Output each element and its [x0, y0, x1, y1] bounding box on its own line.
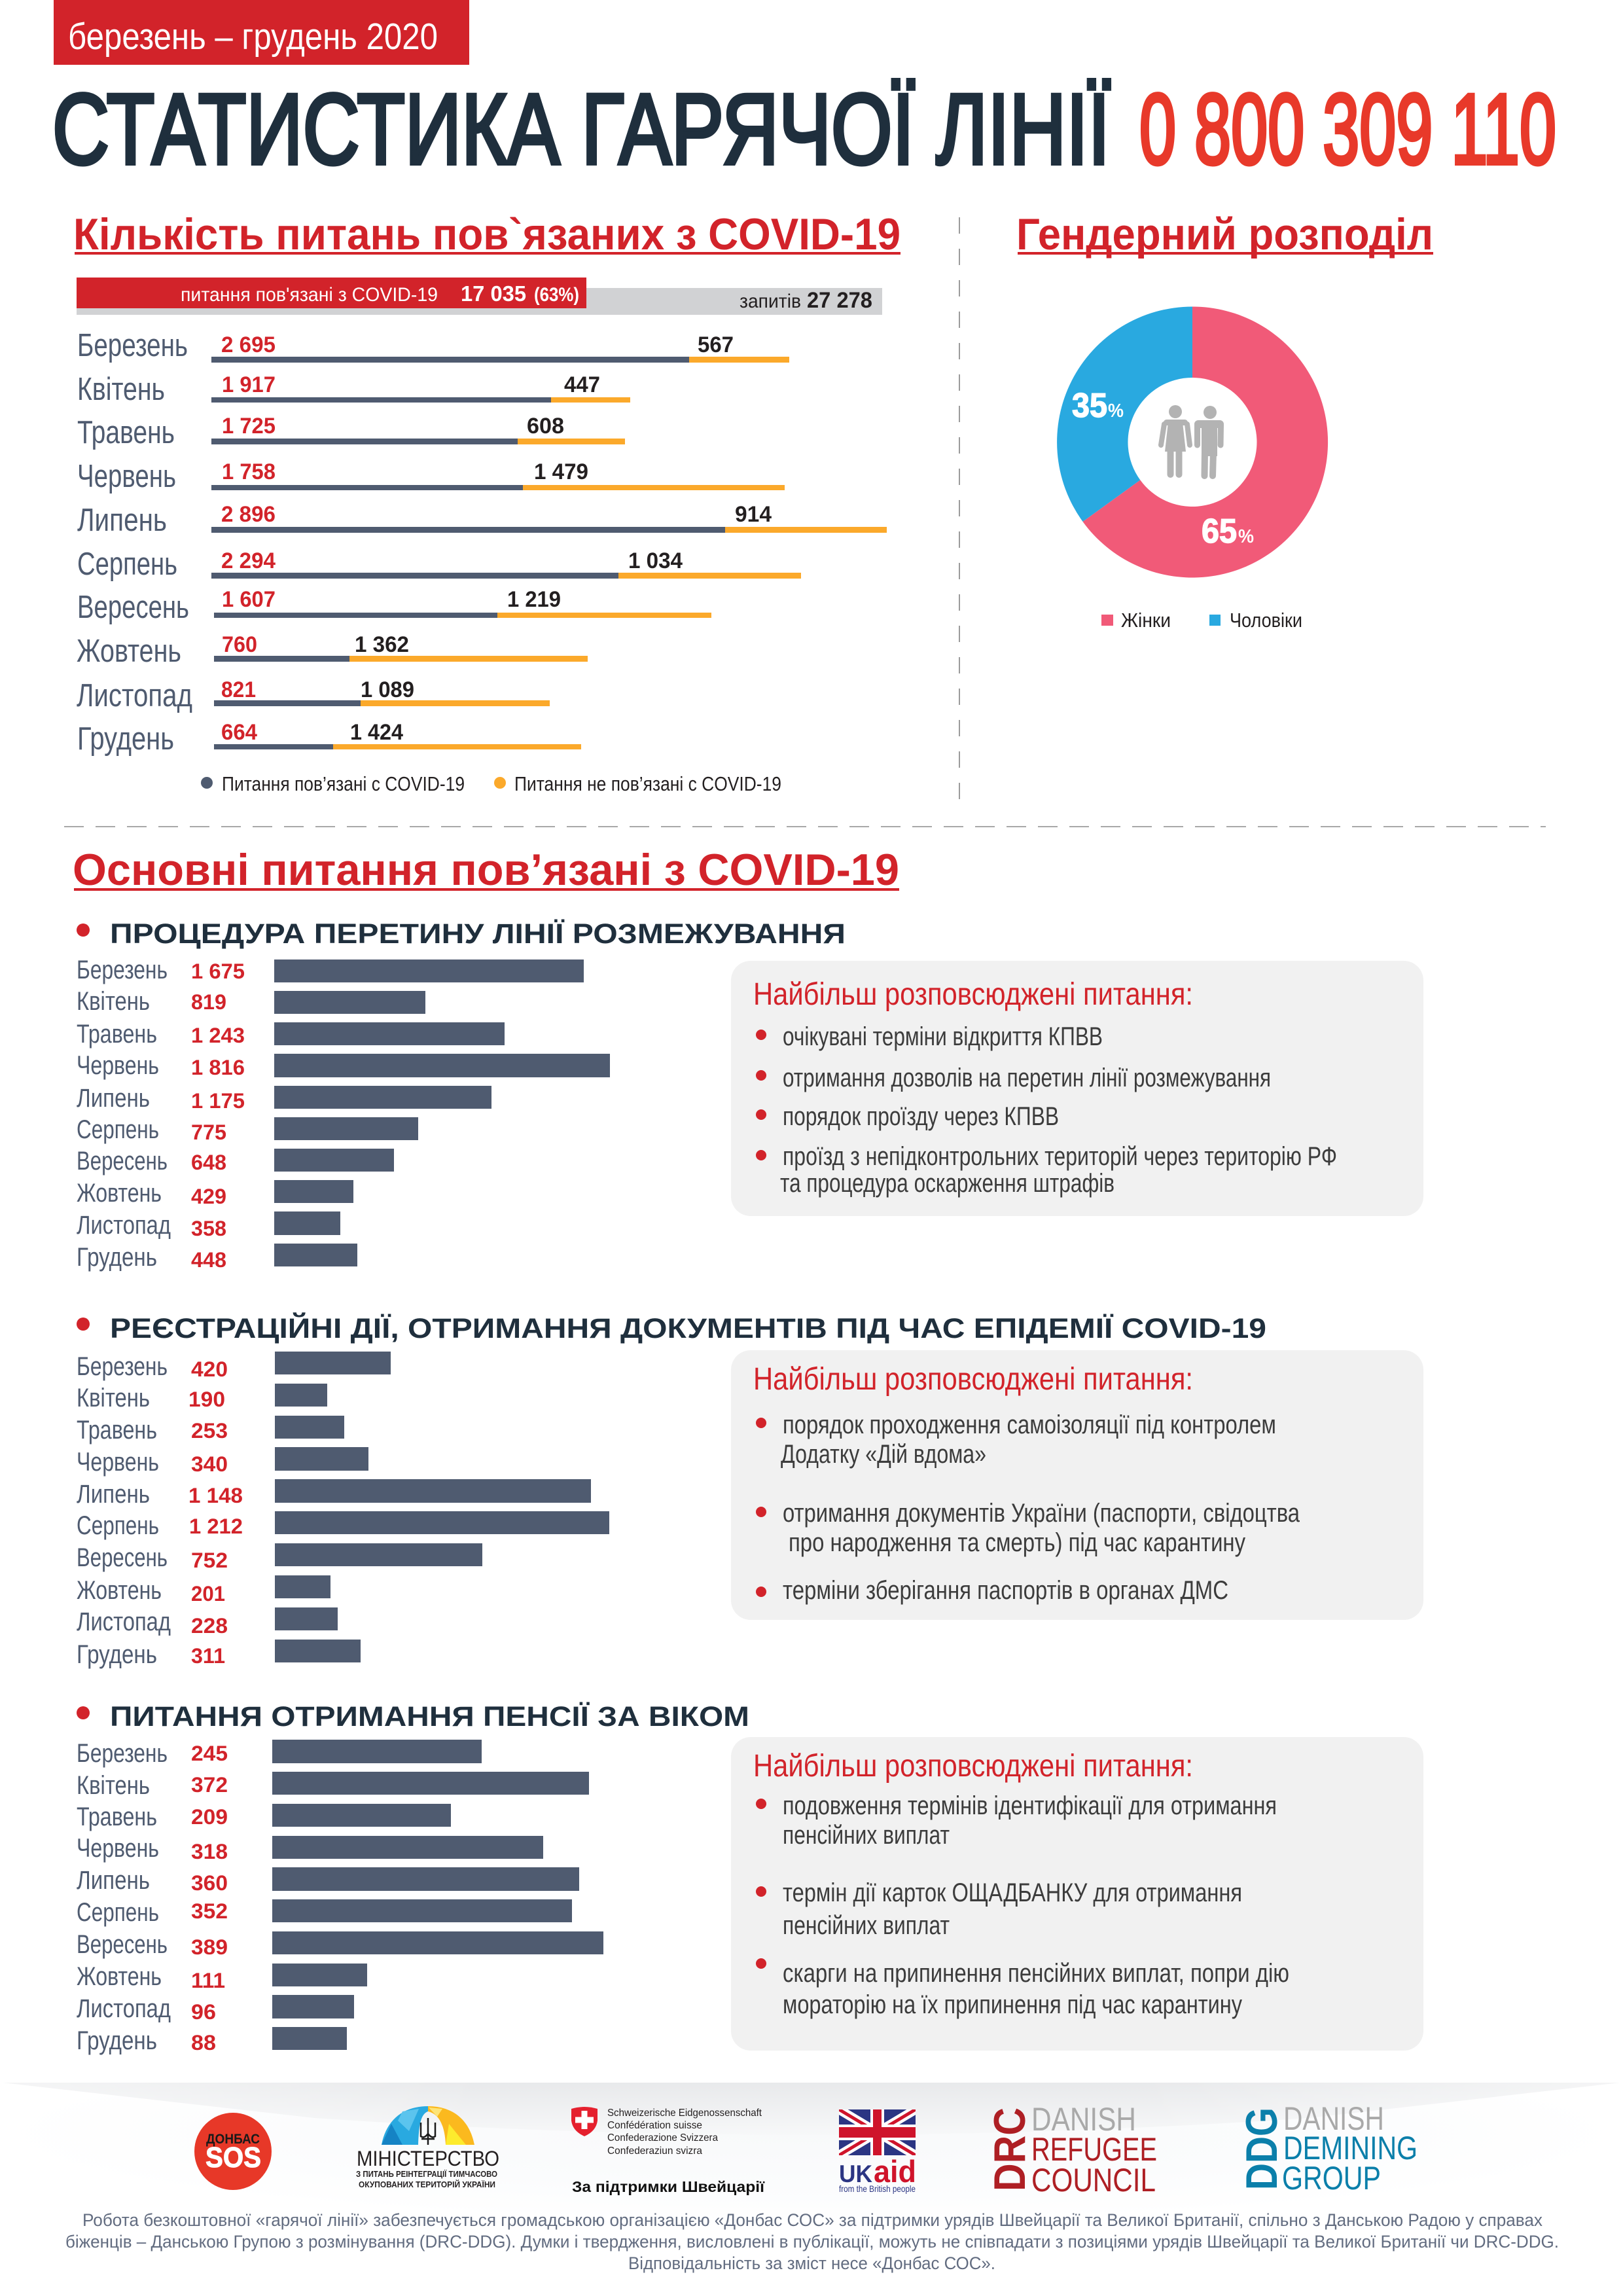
logo: Danish Refugee Council: COUNCIL — [1031, 2162, 1156, 2198]
footer disclaimer text — [65, 2210, 1559, 2273]
row: липень 360: Липень — [77, 1866, 150, 1895]
row: травень 1 243 — [77, 1020, 505, 1049]
row: листопад 96: Листопад — [77, 1994, 171, 2023]
row: жовтень 201: Жовтень — [77, 1576, 162, 1605]
row: березень — [77, 328, 789, 363]
row: вересень 389 — [77, 1930, 603, 1959]
section heading: registration and documents: РЕЄСТРАЦІЙНІ ДІЇ, ОТРИМАННЯ ДОКУМЕНТІВ ПІД ЧАС ЕПІДЕМІЇ COVID-19 — [110, 1312, 1266, 1344]
total bar: COVID questions of all requests: питання пов'язані з COVID-19 — [181, 284, 438, 306]
panel: registration common questions — [731, 1350, 1423, 1620]
row: травень: Травень — [77, 415, 175, 450]
row: липень: 2 896 — [221, 502, 276, 527]
row: грудень 311 — [77, 1640, 361, 1669]
list items: порядок проходження самоізоляції під контролем — [783, 1410, 1276, 1439]
logo: Danish Demining Group: DEMINING — [1283, 2130, 1418, 2166]
row: березень 1 675: Березень — [77, 956, 168, 984]
row: березень 420: Березень — [77, 1352, 168, 1381]
row: травень 253: Травень — [77, 1416, 157, 1444]
row: вересень 389: Вересень — [77, 1930, 168, 1959]
list items: про народження та смерть) під час карантину — [789, 1528, 1245, 1557]
row: вересень 752 — [77, 1543, 482, 1572]
logo: Ministry: МІНІСТЕРСТВО — [357, 2147, 499, 2170]
row: листопад 228: Листопад — [77, 1607, 171, 1636]
row: жовтень 429: Жовтень — [77, 1179, 162, 1208]
row: серпень 1 212: Серпень — [77, 1511, 159, 1540]
row: червень 1 816: Червень — [77, 1051, 159, 1080]
row: травень 209 — [77, 1803, 451, 1831]
row: серпень 1 212: 1 212 — [189, 1515, 243, 1538]
row: квітень 190: 190 — [188, 1388, 225, 1411]
row: жовтень: 1 362 — [355, 632, 409, 657]
row: листопад 228: 228 — [191, 1614, 228, 1638]
row: квітень 819: Квітень — [77, 987, 150, 1016]
list items: отримання документів України (паспорти, свідоцтва — [783, 1499, 1300, 1528]
row: квітень 190: Квітень — [77, 1384, 150, 1412]
chart legend: Питання пов’язані с COVID-19 — [222, 772, 465, 795]
row: березень: Березень — [77, 328, 188, 363]
row: серпень 1 212 — [77, 1511, 609, 1540]
row: березень: 2 695 — [221, 332, 276, 357]
total bar: COVID questions of all requests: запитів — [740, 291, 801, 312]
row: грудень: Грудень — [77, 721, 174, 757]
heading: main questions: Основні питання пов’язані з COVID-19 — [73, 845, 899, 895]
row: вересень 648: 648 — [191, 1151, 226, 1174]
row: серпень: Серпень — [77, 547, 177, 582]
list items: пенсійних виплат — [783, 1911, 950, 1940]
panel heading: Найбільш розповсюджені питання: — [753, 1749, 1193, 1784]
donut chart: gender — [1057, 306, 1328, 577]
row: квітень 372: 372 — [191, 1773, 228, 1797]
row: червень: 1 479 — [534, 459, 588, 484]
row: червень 340: 340 — [191, 1452, 228, 1476]
row: квітень — [77, 372, 630, 407]
row: квітень 372 — [77, 1771, 589, 1800]
logo: Danish Refugee Council — [985, 2101, 1157, 2198]
row: червень 318 — [77, 1834, 543, 1863]
row: червень 340: Червень — [77, 1448, 159, 1477]
donut legend — [1101, 609, 1302, 632]
row: червень — [77, 459, 785, 494]
logo: Swiss Confederation: Confederaziun svizra — [607, 2145, 702, 2157]
row: липень: 914 — [735, 502, 772, 527]
row: травень 209: Травень — [77, 1803, 157, 1831]
row: травень 1 243: Травень — [77, 1020, 157, 1049]
logo: Swiss Confederation: Confédération suisse — [607, 2120, 702, 2131]
logo: Danish Demining Group — [1237, 2100, 1418, 2197]
row: вересень 752: Вересень — [77, 1543, 168, 1572]
total bar: COVID questions of all requests: (63%) — [534, 284, 579, 306]
chart legend: Питання не пов’язані с COVID-19 — [514, 772, 781, 795]
total bar: COVID questions of all requests — [77, 278, 882, 315]
list items: проїзд з непідконтрольних територій через територію РФ — [783, 1142, 1337, 1171]
total bar: COVID questions of all requests: 27 278 — [807, 288, 872, 313]
label: men 35%: 35 — [1072, 387, 1107, 425]
label: men 35%: % — [1108, 401, 1124, 422]
panel: crossing common questions — [731, 961, 1423, 1216]
row: липень 1 175 — [77, 1084, 491, 1113]
logo: Ministry: З ПИТАНЬ РЕІНТЕГРАЦІЇ ТИМЧАСОВО — [356, 2169, 497, 2179]
row: серпень 352: 352 — [191, 1899, 228, 1923]
row: липень: Липень — [77, 503, 167, 538]
row: серпень: 2 294 — [221, 548, 276, 573]
row: липень 1 148 — [77, 1479, 591, 1509]
logo: Danish Demining Group: DDG — [1237, 2108, 1287, 2190]
list items — [756, 1022, 1337, 1198]
row: серпень 775: 775 — [191, 1121, 226, 1144]
row: липень 1 175: 1 175 — [191, 1089, 245, 1113]
donut legend: Чоловіки — [1230, 609, 1302, 632]
row: вересень: 1 607 — [222, 587, 276, 612]
row: жовтень: Жовтень — [77, 634, 181, 669]
row: березень 245: Березень — [77, 1739, 168, 1768]
row: грудень 448: Грудень — [77, 1243, 157, 1272]
row: травень 1 243: 1 243 — [191, 1024, 245, 1047]
row: серпень 352 — [77, 1898, 572, 1927]
row: травень: 608 — [527, 414, 564, 439]
row: квітень 819: 819 — [191, 990, 226, 1014]
row: травень 253 — [77, 1416, 344, 1444]
row: серпень — [77, 547, 801, 582]
row: листопад: Листопад — [77, 678, 192, 713]
row: червень 318: Червень — [77, 1834, 159, 1863]
row: травень 209: 209 — [191, 1805, 228, 1829]
row: грудень — [77, 720, 581, 757]
row: березень 245: 245 — [191, 1742, 228, 1765]
row: вересень: Вересень — [77, 590, 189, 625]
row: липень 1 148: 1 148 — [188, 1484, 243, 1507]
panel: pension common questions — [731, 1737, 1423, 2051]
row: грудень 448: 448 — [191, 1248, 226, 1272]
row: червень: 1 758 — [222, 459, 276, 484]
row: листопад 96 — [77, 1994, 354, 2024]
row: грудень 448 — [77, 1243, 357, 1272]
list items: подовження термінів ідентифікації для отримання — [783, 1791, 1277, 1820]
row: липень 1 148: Липень — [77, 1480, 150, 1509]
logo: UK aid: UK — [839, 2161, 872, 2187]
row: липень 360 — [77, 1866, 579, 1895]
logo: Donbas SOS: SOS — [205, 2142, 261, 2174]
row: грудень 311: Грудень — [77, 1640, 157, 1669]
row: жовтень 201: 201 — [191, 1582, 225, 1605]
row: листопад: 1 089 — [361, 677, 414, 702]
logo: Swiss Confederation: Schweizerische Eidgenossenschaft — [607, 2108, 762, 2119]
row: березень: 567 — [698, 332, 734, 357]
row: березень 245 — [77, 1739, 482, 1768]
logo: UK aid: from the British people — [839, 2183, 916, 2194]
row: квітень: 447 — [564, 372, 600, 397]
logo: Danish Demining Group: DANISH — [1283, 2100, 1384, 2137]
row: вересень 648 — [77, 1147, 394, 1175]
row: червень: Червень — [77, 459, 176, 494]
row: грудень 88 — [77, 2026, 347, 2055]
title: СТАТИСТИКА ГАРЯЧОЇ ЛІНІЇ — [52, 73, 1110, 185]
logo: Ministry: ОКУПОВАНИХ ТЕРИТОРІЙ УКРАЇНИ — [359, 2179, 495, 2189]
panel heading: Найбільш розповсюджені питання: — [753, 1362, 1193, 1397]
row: вересень 752: 752 — [191, 1549, 228, 1572]
list items: Додатку «Дій вдома» — [781, 1440, 986, 1469]
row: квітень: 1 917 — [222, 372, 276, 397]
row: липень — [77, 502, 887, 538]
list items: та процедура оскарження штрафів — [780, 1169, 1115, 1198]
date banner: березень – грудень 2020 — [68, 16, 438, 58]
heading: gender distribution: Гендерний розподіл — [1016, 209, 1433, 259]
logo: Swiss Confederation: Confederazione Svizzera — [607, 2132, 718, 2144]
row: червень 340 — [77, 1447, 368, 1477]
row: листопад 358 — [77, 1211, 340, 1240]
row: липень 360: 360 — [191, 1871, 228, 1895]
icon: trident — [421, 2118, 435, 2145]
list items — [756, 1791, 1289, 2019]
total bar: COVID questions of all requests: 17 035 — [461, 281, 526, 306]
row: серпень 775 — [77, 1115, 418, 1144]
row: вересень 389: 389 — [191, 1935, 228, 1959]
logo: UK aid: aid — [874, 2154, 916, 2189]
section heading: crossing procedure: ПРОЦЕДУРА ПЕРЕТИНУ ЛІНІЇ РОЗМЕЖУВАННЯ — [110, 918, 846, 950]
row: квітень: Квітень — [77, 372, 165, 407]
row: березень 420: 420 — [191, 1357, 228, 1381]
list items: скарги на припинення пенсійних виплат, попри дію — [783, 1959, 1289, 1988]
row: квітень 819 — [77, 987, 425, 1016]
row: травень: 1 725 — [222, 414, 276, 439]
row: червень 318: 318 — [191, 1840, 228, 1863]
row: вересень: 1 219 — [507, 587, 561, 612]
row: вересень — [77, 587, 711, 625]
row: жовтень 111: 111 — [191, 1969, 225, 1992]
section heading: pension: ПИТАННЯ ОТРИМАННЯ ПЕНСІЇ ЗА ВІКОМ — [110, 1701, 749, 1732]
list items: очікувані терміни відкриття КПВВ — [783, 1022, 1103, 1051]
row: жовтень — [77, 632, 588, 669]
footer disclaimer text: Робота безкоштовної «гарячої лінії» забезпечується громадською організацією «Донбас СОС» за підтримки урядів Швейцарії та Великої Британії, спільно з Данською Радою у справах — [82, 2210, 1543, 2230]
logo: Donbas SOS: ДОНБАС — [206, 2132, 260, 2147]
row: червень 1 816 — [77, 1051, 610, 1080]
row: квітень 372: Квітень — [77, 1771, 150, 1800]
row: травень 253: 253 — [191, 1419, 228, 1443]
row: серпень 775: Серпень — [77, 1115, 159, 1144]
bar chart: registration and documents — [77, 1352, 609, 1669]
logo: Donbas SOS — [194, 2113, 272, 2190]
row: жовтень 429 — [77, 1179, 353, 1208]
footer background — [5, 2083, 1618, 2135]
logo: Danish Refugee Council: DRC — [985, 2108, 1035, 2191]
label: women 65%: 65 — [1202, 512, 1237, 550]
list items: термін дії карток ОЩАДБАНКУ для отримання — [783, 1878, 1242, 1907]
row: липень 1 175: Липень — [77, 1084, 150, 1113]
row: березень 420 — [77, 1352, 391, 1381]
logo: Ministry — [356, 2106, 499, 2189]
logo: Danish Refugee Council: DANISH — [1031, 2101, 1136, 2138]
row: листопад 358: Листопад — [77, 1211, 171, 1240]
list items — [756, 1410, 1300, 1605]
row: вересень 648: Вересень — [77, 1147, 168, 1175]
logo: Swiss Confederation: За підтримки Швейцарії — [572, 2178, 765, 2195]
row: жовтень 111 — [77, 1962, 367, 1992]
row: листопад 358: 358 — [191, 1217, 226, 1240]
panel heading: Найбільш розповсюджені питання: — [753, 977, 1193, 1012]
row: грудень 88: 88 — [191, 2031, 216, 2054]
row: грудень 311: 311 — [191, 1644, 225, 1668]
row: листопад 228 — [77, 1607, 338, 1638]
logo: Danish Demining Group: GROUP — [1282, 2160, 1381, 2197]
bar chart: pension — [77, 1739, 603, 2055]
date banner — [54, 0, 469, 65]
row: листопад: 821 — [221, 677, 256, 702]
row: грудень: 1 424 — [350, 720, 403, 745]
list items: мораторію на їх припинення під час карантину — [783, 1990, 1242, 2019]
row: грудень 88: Грудень — [77, 2026, 157, 2055]
heading: questions count: Кількість питань пов`язаних з COVID-19 — [73, 209, 901, 259]
donut legend: Жінки — [1121, 609, 1171, 632]
row: травень — [77, 414, 625, 450]
label: women 65%: % — [1238, 526, 1254, 547]
chart legend — [201, 772, 781, 795]
row: березень 1 675: 1 675 — [191, 960, 245, 983]
footer disclaimer text: біженців – Данською Групою з розмінування (DRC-DDG). Думки і твердження, висловлені в публікації, можуть не співпадати з позиціями урядів Швейцарії та Великої Британії чи DRC-DDG. — [65, 2232, 1559, 2251]
list items: отримання дозволів на перетин лінії розмежування — [783, 1064, 1271, 1092]
bar chart: crossing procedure — [77, 956, 610, 1272]
row: червень 1 816: 1 816 — [191, 1056, 245, 1079]
logo: Swiss Confederation — [571, 2107, 765, 2195]
icon: woman and man — [1161, 405, 1224, 476]
row: серпень 352: Серпень — [77, 1898, 159, 1927]
monthly stacked bar chart — [77, 328, 887, 757]
row: жовтень 201 — [77, 1575, 330, 1605]
list items: порядок проїзду через КПВВ — [783, 1102, 1059, 1131]
row: березень 1 675 — [77, 956, 584, 984]
logo: Danish Refugee Council: REFUGEE — [1031, 2131, 1157, 2168]
row: листопад — [77, 677, 550, 713]
list items: терміни зберігання паспортів в органах ДМС — [783, 1576, 1228, 1605]
row: серпень: 1 034 — [628, 548, 683, 573]
row: листопад 96: 96 — [191, 2000, 216, 2024]
row: жовтень: 760 — [222, 632, 257, 657]
row: грудень: 664 — [221, 720, 257, 745]
logo: UK aid — [839, 2109, 916, 2194]
list items: пенсійних виплат — [783, 1821, 950, 1850]
row: жовтень 111: Жовтень — [77, 1962, 162, 1991]
row: жовтень 429: 429 — [191, 1185, 226, 1208]
row: квітень 190 — [77, 1384, 327, 1412]
footer disclaimer text: Відповідальність за зміст несе «Донбас СОС». — [628, 2253, 995, 2273]
